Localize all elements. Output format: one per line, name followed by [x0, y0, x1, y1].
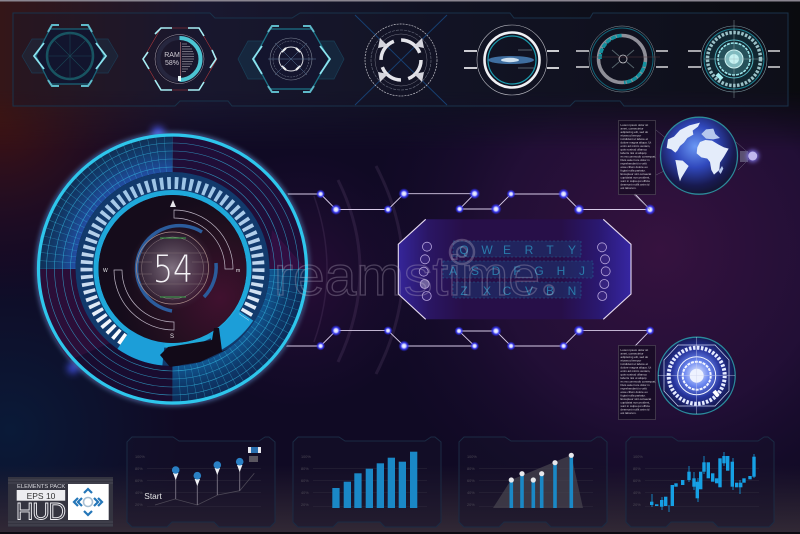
decorative signal arcs	[314, 166, 403, 374]
text block: upper: sunt in culpa qui officia	[620, 179, 650, 183]
text block: lower: laboris nisi ut aliquip	[620, 376, 647, 380]
speed readout: 54	[153, 248, 193, 291]
text block: lower: Lorem ipsum dolor sit	[620, 348, 648, 352]
chart panel: candlestick chart	[626, 437, 774, 527]
text block: lower: esse cillum dolore eu	[620, 390, 648, 394]
milestone pins	[172, 447, 261, 505]
gauge inner dial	[98, 195, 246, 343]
text block: lower: fugiat nulla pariatur.	[620, 394, 646, 398]
RAM value label: RAM	[164, 52, 180, 59]
text block: lower: sunt in culpa qui officia	[620, 404, 650, 408]
text block: upper: deserunt mollit anim id	[620, 182, 650, 186]
key letters: D	[492, 264, 501, 278]
text block: upper: eiusmod tempor	[620, 134, 641, 138]
gauge maroon quadrants	[38, 135, 307, 403]
text block: upper: reprehenderit in velit	[620, 162, 647, 166]
text block: upper: cupidatat non proident,	[620, 176, 650, 180]
key letters: Z	[460, 284, 468, 298]
text block: lower: incididunt ut labore et	[620, 362, 648, 366]
key letters: T	[546, 243, 554, 257]
text block: lower: Excepteur sint occaecat	[620, 397, 651, 401]
top panel frame	[13, 13, 788, 106]
text block: lower: amet, consectetur	[620, 352, 644, 356]
text block: upper: Excepteur sint occaecat	[620, 172, 651, 176]
icon: crosshair hexagon	[238, 26, 344, 92]
key letters: E	[503, 243, 511, 257]
key letters: H	[557, 264, 565, 278]
icon: white arrows ring	[355, 15, 447, 105]
RAM value label: 58%	[165, 60, 179, 67]
globe	[656, 117, 759, 194]
key letters: C	[503, 284, 512, 298]
gauge glow spots	[34, 127, 310, 407]
text block: lower: ex ea commodo consequat.	[620, 380, 656, 384]
key letters: G	[534, 264, 544, 278]
icon: progress ring	[576, 26, 668, 92]
icon: hexagon target	[22, 25, 118, 86]
circuit connectors: lower	[286, 325, 654, 352]
start label: Start	[144, 491, 163, 501]
text block: upper: laboris nisi ut aliquip	[620, 151, 647, 155]
main speed gauge	[34, 127, 310, 407]
key rows	[443, 241, 593, 298]
keyboard screen	[398, 219, 631, 319]
key letters: X	[483, 284, 491, 298]
key letters	[449, 243, 585, 298]
dial compass labels: m	[236, 268, 240, 274]
text block: upper: ex ea commodo consequat.	[620, 154, 656, 158]
text block: lower: adipiscing elit, sed do	[620, 355, 649, 359]
text block: lower: Duis aute irure dolor in	[620, 383, 650, 387]
icon: cyan tech ring	[688, 20, 780, 98]
text block: upper: incididunt ut labore et	[620, 137, 648, 141]
key letters: J	[579, 264, 585, 278]
key letters: S	[471, 264, 479, 278]
HUD badge	[8, 477, 113, 527]
key letters: Q	[459, 243, 469, 257]
text block: lower: est laborum.	[620, 411, 637, 415]
text block: upper: adipiscing elit, sed do	[620, 130, 649, 134]
text block: lower: deserunt mollit anim id	[620, 408, 650, 412]
key letters: N	[568, 284, 576, 298]
key letters: V	[525, 284, 533, 298]
gauge tick band	[86, 183, 259, 355]
glowing radar orb	[658, 337, 735, 414]
text block: upper: est laborum.	[620, 186, 637, 190]
text block: lower: quis nostrud ullamco	[620, 372, 647, 376]
chart panel: bar chart	[293, 437, 441, 527]
key letters: B	[546, 284, 554, 298]
gauge concentric lines	[46, 143, 298, 395]
RAM value label	[164, 52, 180, 67]
dial compass arcs	[114, 210, 233, 330]
text block: upper: esse cillum dolore eu	[620, 165, 648, 169]
text block: lower: dolore magna aliqua. Ut	[620, 366, 651, 370]
dial compass labels: S	[170, 334, 174, 340]
chart panel: milestones line	[127, 437, 275, 527]
icon: RAM 58% gauge hexagon	[143, 28, 217, 90]
key letters: A	[449, 264, 457, 278]
icon: scanner ring	[464, 25, 559, 95]
text block: upper: Lorem ipsum dolor sit	[620, 123, 648, 127]
text block: upper: amet, consectetur	[620, 126, 644, 130]
readout glow and rings	[130, 226, 216, 311]
key letters: R	[525, 243, 534, 257]
gauge outer ring	[38, 135, 306, 403]
text block: lower: reprehenderit in velit	[620, 386, 647, 390]
badge arrows icon	[74, 489, 102, 515]
side buttons	[419, 242, 610, 300]
watermark: reamstime	[274, 244, 540, 307]
text block: upper: fugiat nulla pariatur.	[620, 168, 646, 172]
circuit connectors: upper	[286, 188, 656, 215]
key letters: W	[481, 243, 493, 257]
continents	[667, 123, 729, 181]
HUD badge: ELEMENTS PACK	[17, 484, 65, 490]
HUD badge: HUD	[16, 498, 66, 526]
gauge bottom notch	[160, 328, 228, 367]
HUD badge: EPS 10	[27, 491, 56, 501]
text block: upper: enim ad minim veniam,	[620, 144, 650, 148]
text block: upper: quis nostrud ullamco	[620, 148, 647, 152]
text block: upper: Duis aute irure dolor in	[620, 158, 650, 162]
key letters: F	[513, 264, 521, 278]
key letters: Y	[568, 243, 576, 257]
text block: upper: dolore magna aliqua. Ut	[620, 140, 651, 144]
chart panel: lollipop chart	[459, 437, 607, 527]
gauge grid quadrants	[38, 135, 306, 403]
text block: lower: cupidatat non proident,	[620, 400, 650, 404]
dial compass labels	[103, 200, 240, 340]
text block: upper	[618, 120, 656, 210]
text block: lower	[618, 346, 656, 420]
text block: lower: eiusmod tempor	[620, 358, 641, 362]
text block: lower: enim ad minim veniam,	[620, 369, 650, 373]
dial compass labels: W	[103, 268, 108, 274]
